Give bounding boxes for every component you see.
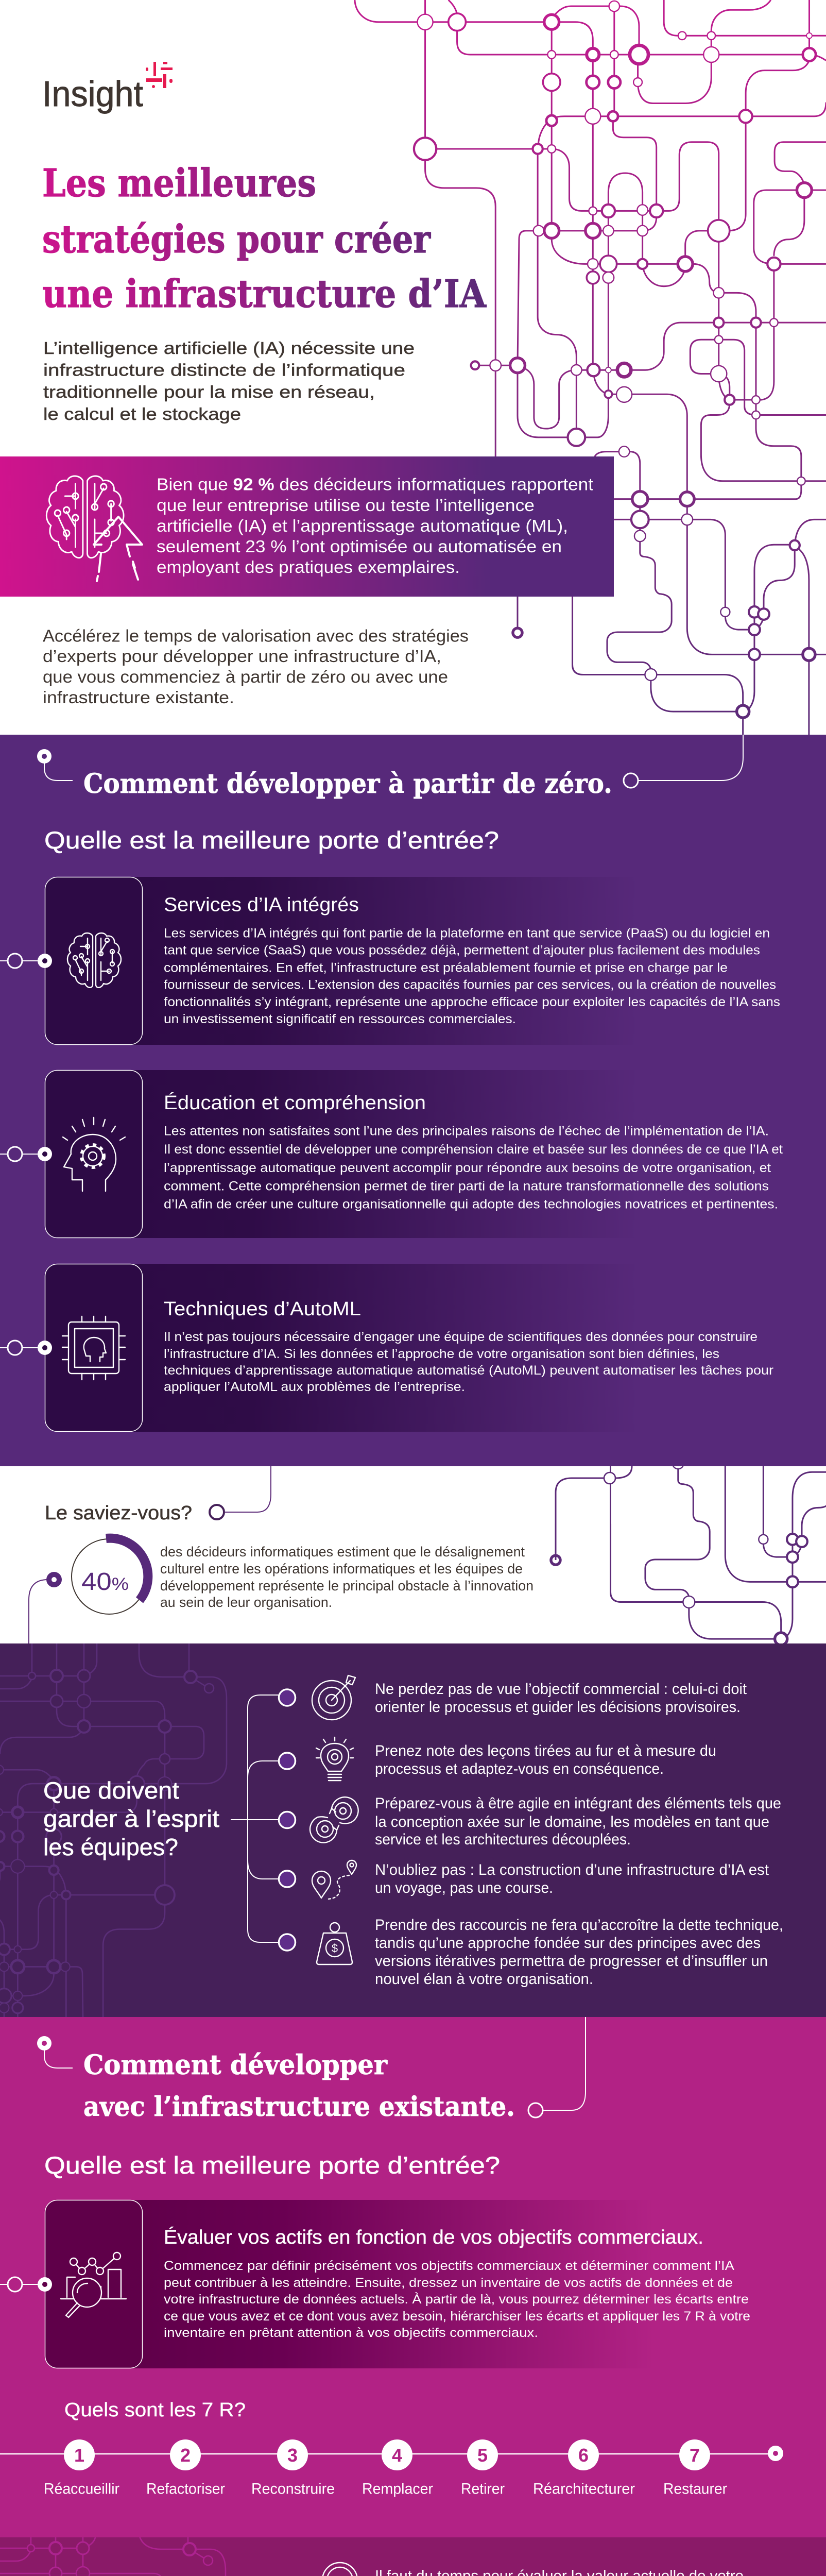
- key points text: orienter le processus et guider les décisions provisoires.: [375, 1699, 741, 1716]
- icon: brain: [67, 933, 121, 988]
- card: Éducation et compréhension: [0, 1070, 783, 1238]
- card text: fonctionnalités s’y intégrant, représente une approche efficace pour exploiter les capacités de l’IA sans: [164, 995, 780, 1009]
- card: Évaluer vos actifs: [0, 2200, 750, 2368]
- donut chart: 40%: 40%: [81, 1568, 129, 1596]
- icon: analytics magnifier: [61, 2252, 126, 2317]
- step 3: [251, 2439, 335, 2498]
- logo: Insight: [42, 62, 173, 114]
- step 7: Restaurer: [663, 2480, 727, 2498]
- key points text: tandis qu’une approche fondée sur des principes avec des: [375, 1935, 761, 1952]
- key points text: un voyage, pas une course.: [375, 1879, 553, 1896]
- heading: Comment développer à partir de zéro.: [83, 768, 612, 800]
- title: une infrastructure d’IA: [42, 272, 487, 316]
- icon: AI chip: [62, 1316, 125, 1380]
- title: [42, 161, 487, 316]
- band text: seulement 23 % l’ont optimisée ou automatisée en: [157, 537, 562, 556]
- subtitle text block: traditionnelle pour la mise en réseau,: [43, 382, 375, 401]
- band text: employant des pratiques exemplaires.: [157, 557, 460, 577]
- step 1: Réaccueillir: [44, 2480, 119, 2498]
- step 3: 3: [287, 2445, 298, 2466]
- key points text: service et les architectures découplées.: [375, 1831, 631, 1848]
- heading: [83, 2049, 515, 2123]
- key points text: versions itératives permettra de progresser et d’insuffler un: [375, 1953, 768, 1970]
- card text: d’IA afin de créer une culture organisationnelle qui adopte des technologies novatrices et pertinentes.: [164, 1197, 778, 1212]
- panel: build from scratch: [0, 735, 826, 1466]
- card text: [164, 2226, 750, 2340]
- card text: tant que service (SaaS) que vous possédez déjà, permettent d’ajouter plus facilement des modules: [164, 943, 760, 958]
- card text: Commencez par définir précisément vos objectifs commerciaux et déterminer comment l’IA: [164, 2259, 734, 2273]
- key points text: processus et adaptez-vous en conséquence.: [375, 1760, 664, 1777]
- title: stratégies pour créer: [42, 217, 431, 262]
- panel: 92% statistic band: [0, 456, 614, 597]
- fact text: développement représente le principal obstacle à l’innovation: [160, 1578, 534, 1594]
- step 7: 7: [690, 2445, 700, 2466]
- step 7: [663, 2439, 727, 2498]
- card text: peut contribuer à les atteindre. Ensuite, dressez un inventaire de vos actifs de données et de: [164, 2276, 733, 2290]
- icon: light bulb with gear: [316, 1737, 353, 1781]
- card text: appliquer l’AutoML aux problèmes de l’entreprise.: [164, 1380, 465, 1394]
- subtitle text block: [43, 338, 415, 423]
- key points text: la conception axée sur le domaine, les modèles en tant que: [375, 1814, 769, 1831]
- card text: un investissement significatif en ressources commerciales.: [164, 1012, 516, 1026]
- key points text: [375, 1681, 783, 1988]
- subtitle text block: L’intelligence artificielle (IA) nécessite une: [43, 338, 415, 358]
- step 5: 5: [477, 2445, 488, 2466]
- icon: money weight: [317, 1923, 352, 1964]
- step 2: 2: [180, 2445, 191, 2466]
- fact text: des décideurs informatiques estiment que le désalignement: [160, 1544, 525, 1560]
- card text: Les services d’IA intégrés qui font partie de la plateforme en tant que service (PaaS) ou du logiciel en: [164, 926, 770, 941]
- step 4: 4: [392, 2445, 402, 2466]
- fact text: [160, 1544, 534, 1610]
- card text: inventaire en prêtant attention à vos objectifs commerciaux.: [164, 2326, 538, 2340]
- subheading: Quelle est la meilleure porte d’entrée?: [44, 826, 499, 854]
- card text: votre infrastructure de données actuels. À partir de là, vous pourrez déterminer les écarts entre: [164, 2292, 749, 2307]
- band text: [157, 475, 593, 577]
- intro paragraph: Accélérez le temps de valorisation avec des stratégies: [43, 626, 469, 645]
- card text: complémentaires. En effet, l’infrastructure est préalablement fournie et prise en charge par le: [164, 960, 728, 975]
- card text: Services d’IA intégrés: [164, 894, 359, 916]
- card: Services d'IA intégrés: [0, 877, 780, 1045]
- key points text: N’oubliez pas : La construction d’une infrastructure d’IA est: [375, 1861, 769, 1878]
- heading: Quels sont les 7 R: Quels sont les 7 R?: [64, 2399, 246, 2421]
- heading: les équipes?: [43, 1834, 178, 1860]
- step 6: Réarchitecturer: [533, 2480, 635, 2498]
- heading: Le saviez-vous: Le saviez-vous?: [45, 1502, 192, 1524]
- heading: Que doivent: [43, 1777, 179, 1804]
- card text: Il n’est pas toujours nécessaire d’engager une équipe de scientifiques des données pour construire: [164, 1330, 758, 1344]
- heading: garder à l’esprit: [43, 1805, 219, 1832]
- card text: Il est donc essentiel de développer une compréhension claire et basée sur les données de ce que l’IA et: [164, 1142, 783, 1157]
- fact text: culturel entre les opérations informatiques et les équipes de: [160, 1561, 523, 1577]
- icon: route pins: [312, 1860, 356, 1899]
- title: Les meilleures: [42, 161, 316, 206]
- key points text: nouvel élan à votre organisation.: [375, 1971, 593, 1988]
- key points text: Prenez note des leçons tirées au fur et à mesure du: [375, 1742, 716, 1759]
- card text: comment. Cette compréhension permet de tirer parti de la nature transformationnelle des solutions: [164, 1179, 769, 1194]
- step 1: [44, 2439, 119, 2498]
- band text: Bien que 92 % des décideurs informatiques rapportent: [157, 475, 593, 494]
- step 2: [146, 2439, 225, 2498]
- intro paragraph: que vous commenciez à partir de zéro ou avec une: [43, 667, 448, 686]
- card text: l’infrastructure d’IA. Si les données et l’approche de votre organisation sont bien définies, les: [164, 1347, 719, 1361]
- step 3: Reconstruire: [251, 2480, 335, 2498]
- step 4: Remplacer: [362, 2480, 433, 2498]
- intro paragraph: d’experts pour développer une infrastructure d’IA,: [43, 647, 441, 666]
- card text: [164, 1092, 783, 1212]
- intro paragraph: [43, 626, 469, 707]
- heading connector: [37, 735, 743, 788]
- icon: gears cycle: [310, 1797, 358, 1843]
- card text: fournisseur de services. L’extension des capacités fournies par ces services, ou la création de nouvelles: [164, 978, 776, 992]
- faint circuit background: [0, 1643, 228, 2017]
- faint circuit background: [0, 2537, 227, 2576]
- subheading: Quelle est la meilleure porte d’entrée?: [44, 2151, 500, 2179]
- band text: artificielle (IA) et l’apprentissage automatique (ML),: [157, 516, 568, 535]
- key points text: Ne perdez pas de vue l’objectif commercial : celui-ci doit: [375, 1681, 747, 1698]
- step 2: Refactoriser: [146, 2480, 225, 2498]
- panel: what teams should keep in mind (existing): [0, 2537, 826, 2576]
- subtitle text block: le calcul et le stockage: [43, 404, 241, 423]
- card text: [164, 894, 780, 1026]
- heading: avec l’infrastructure existante.: [83, 2091, 515, 2123]
- card text: techniques d’apprentissage automatique automatisé (AutoML) peuvent automatiser les tâches pour: [164, 1363, 773, 1378]
- heading: [43, 1777, 219, 1860]
- connector tree: [231, 1689, 296, 1951]
- card text: [164, 1298, 773, 1394]
- key points text: Préparez-vous à être agile en intégrant des éléments tels que: [375, 1795, 781, 1812]
- step 6: 6: [578, 2445, 589, 2466]
- step 5: Retirer: [461, 2480, 505, 2498]
- icon: brain with arrow: [46, 476, 142, 581]
- card: Techniques d'AutoML: [0, 1264, 773, 1432]
- icon: magnifier: [314, 2563, 357, 2576]
- circuit pattern: did-you-know area: [549, 1466, 826, 1643]
- panel: build on existing infrastructure: [0, 2017, 826, 2537]
- heading: Comment développer: [83, 2049, 388, 2081]
- band text: que leur entreprise utilise ou teste l’intelligence: [157, 496, 535, 515]
- hero circuit pattern: [355, 0, 826, 735]
- subtitle text block: infrastructure distincte de l’informatique: [43, 361, 405, 380]
- card text: Éducation et compréhension: [164, 1092, 426, 1114]
- icon: head with gear: [63, 1117, 125, 1191]
- card text: ce que vous avez et ce dont vous avez besoin, hiérarchiser les écarts et appliquer les 7 R à votre: [164, 2309, 750, 2324]
- step 6: [533, 2439, 635, 2498]
- card text: Évaluer vos actifs en fonction de vos objectifs commerciaux.: [164, 2226, 703, 2248]
- did-you-know block: [29, 1466, 534, 1643]
- card text: l’apprentissage automatique peuvent accomplir pour répondre aux besoins de votre organisation, et: [164, 1161, 771, 1175]
- fact text: au sein de leur organisation.: [160, 1595, 332, 1610]
- dollar sign: $: [332, 1942, 338, 1955]
- 7 R timeline: [0, 2439, 783, 2498]
- step 1: 1: [74, 2445, 84, 2466]
- panel: what teams should keep in mind (scratch): [0, 1643, 826, 2017]
- heading connector: [37, 2017, 586, 2117]
- connector: [29, 1466, 271, 1643]
- step 4: [362, 2439, 433, 2498]
- logo: Insight: Insight: [42, 74, 143, 114]
- icon: target: [312, 1675, 355, 1720]
- key points text: Prendre des raccourcis ne fera qu’accroître la dette technique,: [375, 1917, 783, 1934]
- card text: Techniques d’AutoML: [164, 1298, 361, 1320]
- intro paragraph: infrastructure existante.: [43, 688, 234, 707]
- step 5: [461, 2439, 505, 2498]
- donut chart: 40%: [72, 1538, 148, 1614]
- card text: Les attentes non satisfaites sont l’une des principales raisons de l’échec de l’implémentation de l’IA.: [164, 1124, 769, 1138]
